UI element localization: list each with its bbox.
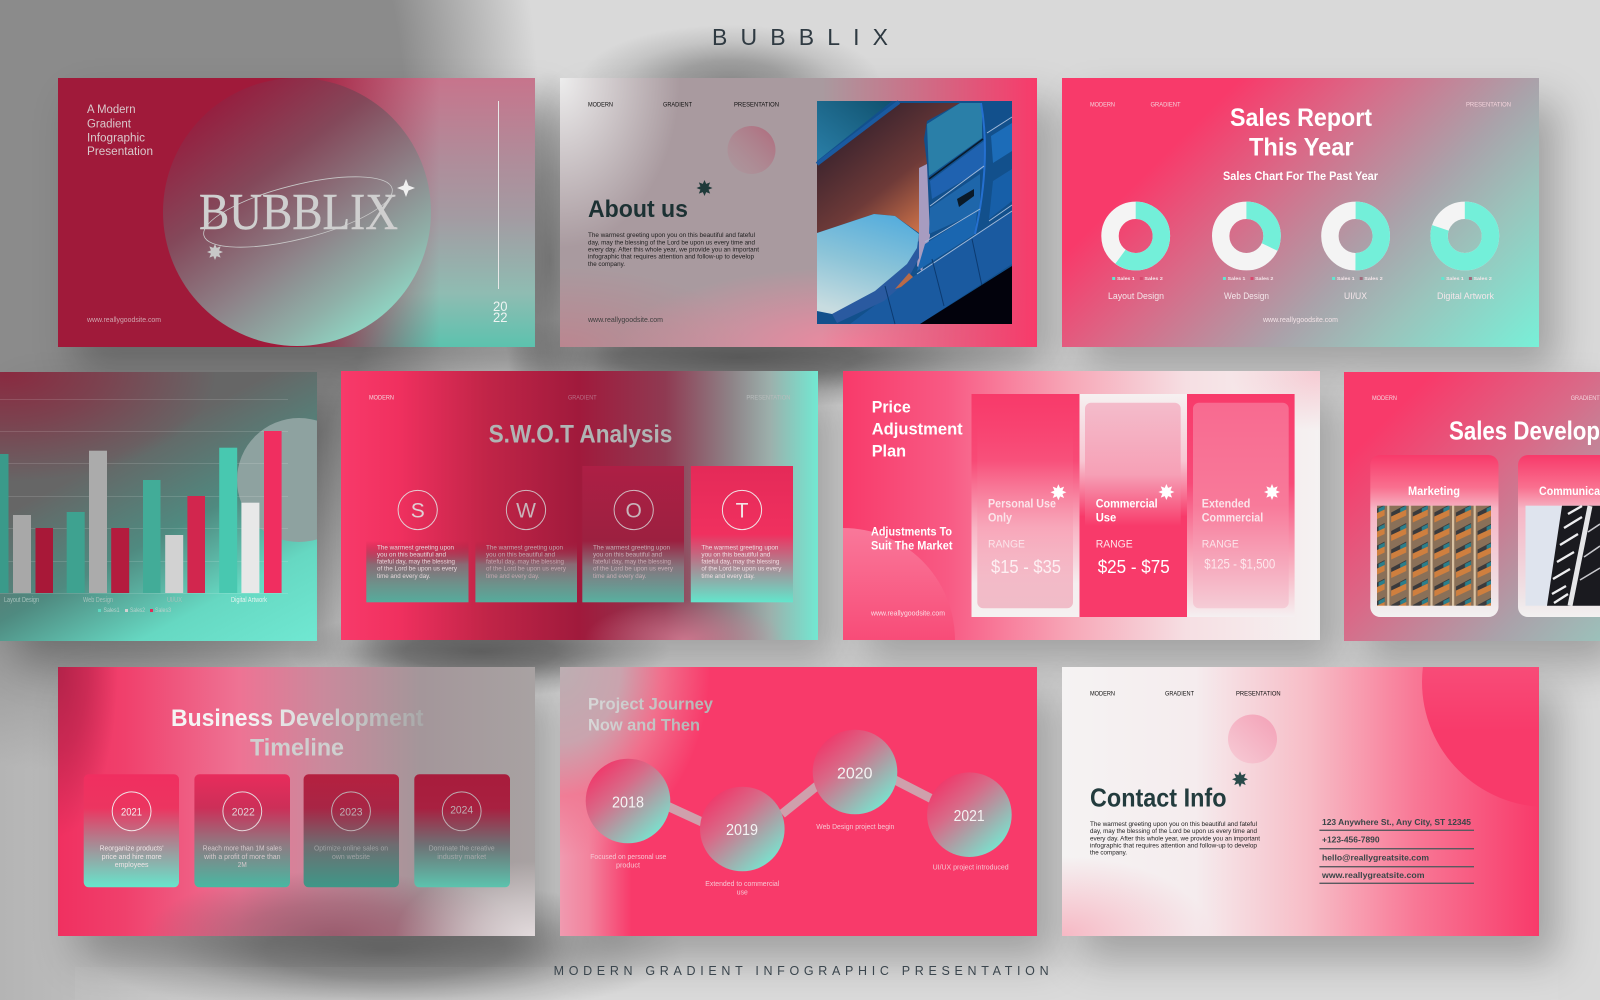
- card 2021: 2021: [121, 806, 142, 818]
- price column 2: RANGE: [1096, 538, 1133, 550]
- slide: contact info: [1062, 667, 1539, 936]
- node 2021: [927, 772, 1012, 857]
- paragraph: the company.: [588, 261, 625, 268]
- card T: [691, 466, 793, 602]
- nav labels: PRESENTATION: [1236, 690, 1281, 697]
- card 2022: [194, 774, 290, 887]
- descriptions: Focused on personal use: [590, 854, 666, 861]
- icon: star: [1232, 771, 1248, 787]
- legends: Sales 1: [1446, 276, 1465, 281]
- node 2019: 2019: [726, 822, 758, 839]
- card T: fateful day, may the blessing: [701, 559, 780, 566]
- photo: building: [817, 101, 1012, 324]
- card W: The warmest greeting upon: [486, 544, 563, 551]
- card T: you on this beautiful and: [701, 551, 771, 558]
- card 2024: 2024: [450, 804, 473, 816]
- contact list: +123-456-7890: [1322, 836, 1380, 845]
- card O: you on this beautiful and: [593, 551, 662, 558]
- legends: Sales 1: [1337, 276, 1355, 281]
- card T: of the Lord be upon us every: [701, 566, 782, 573]
- descriptions: [590, 824, 1009, 896]
- card S: fateful day, may the blessing: [377, 559, 455, 566]
- legends: Sales 2: [1255, 276, 1274, 281]
- subtitle: Infographic: [87, 132, 145, 144]
- price column 2: Use: [1096, 513, 1116, 525]
- heading: about us: About us: [588, 196, 688, 223]
- card T: time and every day.: [701, 573, 755, 580]
- card 2023: 2023: [340, 806, 362, 818]
- heading: Timeline: [250, 734, 344, 761]
- card: communication: [1518, 455, 1600, 617]
- legends: [1112, 276, 1493, 281]
- card T: The warmest greeting upon: [701, 544, 779, 551]
- chart labels: Web Design: [1224, 291, 1269, 301]
- card 2022: Reach more than 1M sales: [203, 844, 282, 853]
- heading: Business Development: [171, 705, 424, 732]
- subtitle: [87, 104, 153, 158]
- slide: swot: [341, 371, 818, 640]
- card W: W: [516, 500, 536, 523]
- nav labels: MODERN: [1372, 395, 1397, 402]
- subheading: [871, 527, 953, 553]
- large gradient circle: [163, 78, 431, 346]
- slide: sales development: [1344, 372, 1600, 641]
- paragraph: day, may the blessing of the Lord be upon us every time and: [1090, 828, 1257, 835]
- card W: of the Lord be upon us every: [486, 566, 567, 573]
- contact list: 123 Anywhere St., Any City, ST 12345: [1322, 818, 1472, 827]
- nav labels: GRADIENT: [663, 102, 692, 108]
- card O: fateful day, may the blessing: [593, 559, 671, 566]
- card: marketing: Marketing: [1408, 484, 1460, 498]
- website: www.reallygoodsite.com: [86, 315, 161, 324]
- heading: Now and Then: [588, 716, 700, 735]
- paragraph: [1090, 821, 1260, 857]
- paragraph: infographic that requires attention and follow-up to develop: [1090, 842, 1257, 849]
- card W: [475, 466, 577, 602]
- price column 1: Personal Use: [988, 499, 1056, 511]
- card O: time and every day.: [593, 573, 647, 580]
- card 2022: 2022: [232, 806, 255, 818]
- card S: of the Lord be upon us every: [377, 566, 458, 573]
- connectors: [665, 780, 932, 822]
- descriptions: UI/UX project introduced: [933, 864, 1009, 871]
- heading: Adjustment: [872, 420, 963, 439]
- paragraph: day, may the blessing of the Lord be upon us every time and: [588, 239, 755, 246]
- card 2021: Reorganize products': [100, 844, 164, 853]
- heading: [171, 705, 424, 761]
- price column 1: RANGE: [988, 538, 1025, 550]
- nav labels: MODERN: [1090, 690, 1115, 697]
- heading: Contact Info: [1090, 783, 1226, 813]
- legend: [98, 608, 172, 614]
- year: 20: [493, 298, 508, 314]
- contact list: www.reallygreatsite.com: [1321, 871, 1424, 880]
- heading: Plan: [872, 441, 906, 460]
- card 2022: 2M: [238, 860, 247, 869]
- price column 1: Only: [988, 513, 1013, 525]
- chart: donut ui/ux: [1330, 210, 1381, 262]
- node 2021: 2021: [954, 808, 985, 825]
- contact list: [1319, 818, 1474, 884]
- descriptions: Web Design project begin: [816, 824, 894, 831]
- subtitle: A Modern: [87, 104, 136, 116]
- card 2021: [84, 774, 179, 887]
- paragraph: The warmest greeting upon you on this beautiful and fateful: [588, 232, 756, 239]
- nav labels: [1090, 690, 1281, 697]
- legend: Sales2: [130, 608, 146, 614]
- price column 3: [1187, 394, 1295, 617]
- decorative circle: [1228, 714, 1277, 764]
- year: [493, 298, 508, 325]
- subheading: Suit The Market: [871, 541, 953, 553]
- nav labels: GRADIENT: [1150, 102, 1181, 108]
- paragraph: infographic that requires attention and follow-up to develop: [588, 254, 754, 261]
- decorative blob: [1422, 557, 1600, 807]
- heading: Price: [872, 398, 911, 417]
- nav labels: PRESENTATION: [746, 394, 791, 402]
- card 2023: Optimize online sales on: [314, 844, 388, 853]
- paragraph: every day. After this whole year, we provide you an important: [588, 246, 759, 254]
- slide: cover: [58, 78, 535, 347]
- card O: [582, 466, 684, 602]
- price column 1: $15 - $35: [991, 557, 1061, 577]
- card W: time and every day.: [486, 573, 540, 580]
- legend: Sales3: [155, 608, 172, 614]
- card 2024: Dominate the creative: [429, 844, 495, 853]
- card S: The warmest greeting upon: [377, 544, 454, 551]
- website: www.reallygoodsite.com: [870, 608, 945, 617]
- heading: BUBBLIX: BUBBLIX: [712, 24, 888, 50]
- heading: [1230, 104, 1373, 162]
- nav labels: GRADIENT: [568, 394, 597, 402]
- descriptions: product: [616, 862, 640, 869]
- slide: project journey: [560, 667, 1037, 936]
- card S: you on this beautiful and: [377, 551, 446, 558]
- nav labels: [1372, 395, 1600, 402]
- slide: bar chart: [0, 372, 317, 641]
- axis labels: Layout Design: [4, 595, 39, 604]
- legend: Sales1: [104, 608, 120, 614]
- price column 2: Commercial: [1096, 499, 1158, 511]
- node 2020: 2020: [837, 765, 873, 782]
- nav labels: MODERN: [588, 102, 613, 108]
- heading: This Year: [1249, 134, 1354, 162]
- price column 1: [972, 394, 1080, 617]
- descriptions: Extended to commercial: [705, 881, 780, 888]
- nav labels: PRESENTATION: [734, 102, 779, 108]
- chart: donut web design: [1221, 210, 1272, 262]
- website: www.reallygoodsite.com: [587, 315, 663, 324]
- paragraph: the company.: [1090, 850, 1127, 857]
- subtitle: Gradient: [87, 118, 132, 130]
- axis labels: Digital Artwork: [231, 595, 267, 604]
- card S: [366, 466, 468, 602]
- heading: Sales Report: [1230, 104, 1373, 132]
- card 2024: industry market: [437, 852, 486, 861]
- decorative circle: [237, 418, 361, 542]
- contact list: hello@reallygreatsite.com: [1322, 853, 1429, 862]
- heading: Project Journey: [588, 694, 714, 713]
- node 2018: 2018: [612, 795, 644, 812]
- price column 3: RANGE: [1202, 538, 1239, 550]
- price column 3: Extended: [1202, 499, 1250, 511]
- axis labels: [4, 595, 267, 604]
- nav labels: [588, 102, 779, 108]
- orbit ellipse: [197, 162, 399, 262]
- card S: time and every day.: [377, 573, 431, 580]
- paragraph: The warmest greeting upon you on this beautiful and fateful: [1090, 821, 1258, 828]
- subtitle: Presentation: [87, 146, 153, 158]
- year: 22: [493, 309, 508, 325]
- nav labels: PRESENTATION: [1466, 102, 1511, 108]
- card T: T: [736, 500, 749, 523]
- legends: Sales 2: [1474, 276, 1493, 281]
- footer caption: MODERN GRADIENT INFOGRAPHIC PRESENTATION: [554, 964, 1049, 978]
- website: www.reallygoodsite.com: [1262, 315, 1338, 324]
- chart labels: Layout Design: [1108, 291, 1164, 301]
- slide: price plan: [843, 371, 1320, 640]
- slide: sales report: [1062, 78, 1539, 347]
- chart labels: [1108, 291, 1494, 301]
- logo wordmark: BUBBLIX: [199, 184, 398, 241]
- price column 3: Commercial: [1202, 513, 1263, 525]
- card 2022: with a profit of more than: [203, 852, 281, 861]
- price column 3: $125 - $1,500: [1204, 555, 1275, 571]
- card 2024: [414, 774, 510, 887]
- legends: Sales 1: [1228, 276, 1246, 281]
- card S: S: [411, 500, 425, 523]
- nav labels: [1090, 102, 1511, 108]
- nav labels: [369, 394, 791, 402]
- card 2023: own website: [332, 852, 370, 861]
- chart labels: UI/UX: [1344, 291, 1367, 301]
- card 2021: employees: [115, 860, 149, 869]
- card W: fateful day, may the blessing: [486, 559, 564, 566]
- heading: S.W.O.T Analysis: [489, 421, 672, 449]
- chart labels: Digital Artwork: [1437, 291, 1494, 301]
- legends: Sales 1: [1117, 276, 1136, 281]
- card O: of the Lord be upon us every: [593, 566, 674, 573]
- chart: donut digital artwork: [1439, 210, 1490, 262]
- heading: [872, 398, 963, 460]
- nav labels: MODERN: [1090, 102, 1115, 108]
- nav labels: MODERN: [369, 394, 394, 402]
- subheading: Sales Chart For The Past Year: [1223, 169, 1378, 183]
- paragraph: [588, 232, 759, 268]
- card O: O: [626, 500, 642, 523]
- node 2019: [700, 787, 785, 871]
- icon: star: [696, 180, 712, 196]
- subheading: Adjustments To: [871, 527, 952, 539]
- chart: donut layout design: [1110, 210, 1161, 262]
- legends: Sales 2: [1364, 276, 1384, 281]
- card O: The warmest greeting upon: [593, 544, 670, 551]
- node 2018: [586, 759, 670, 843]
- decorative blob: [731, 528, 955, 752]
- price column 2: [1080, 394, 1187, 617]
- slide: about us: [560, 78, 1037, 347]
- paragraph: every day. After this whole year, we provide you an important: [1090, 835, 1260, 842]
- decorative circle: [728, 126, 776, 174]
- icon: four-point sparkle: [397, 179, 415, 197]
- axis labels: Web Design: [83, 595, 113, 604]
- heading: [588, 694, 714, 735]
- axis labels: UI/UX: [167, 595, 182, 604]
- slide: timeline: [58, 667, 535, 936]
- icon: star: [207, 244, 223, 260]
- card 2021: price and hire more: [102, 852, 162, 861]
- legends: Sales 2: [1144, 276, 1164, 281]
- vertical line: [498, 101, 499, 289]
- bar chart: [0, 431, 282, 593]
- card 2023: [304, 774, 399, 887]
- grid lines: [0, 399, 288, 594]
- node 2020: [813, 730, 897, 814]
- descriptions: use: [737, 889, 748, 896]
- card: marketing: [1370, 455, 1498, 617]
- price column 2: $25 - $75: [1098, 557, 1170, 577]
- nav labels: GRADIENT: [1165, 690, 1194, 697]
- card W: you on this beautiful and: [486, 551, 555, 558]
